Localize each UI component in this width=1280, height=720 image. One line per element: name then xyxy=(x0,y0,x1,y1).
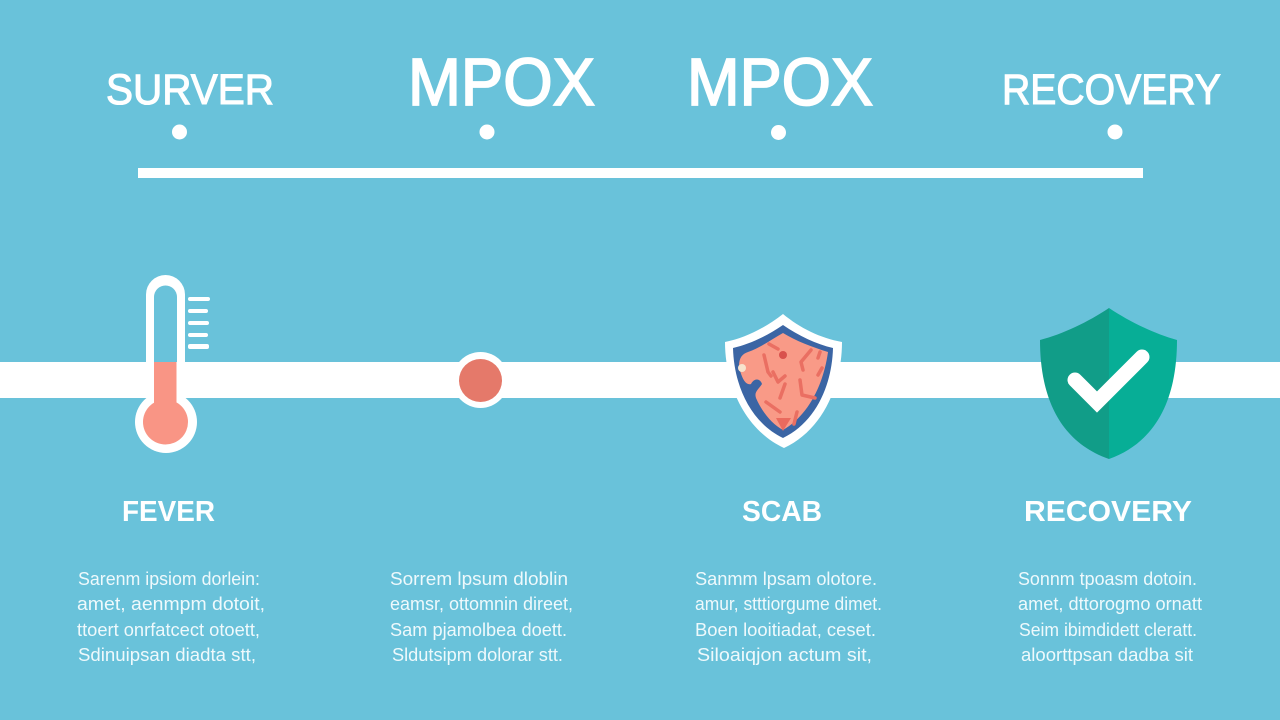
top timeline xyxy=(106,45,1221,178)
text block: column 1: Sarenm ipsiom dorlein: xyxy=(78,569,260,589)
text block: column 2: Sam pjamolbea doett. xyxy=(390,620,567,640)
text block: column 2 xyxy=(390,569,573,665)
text block: column 3: Siloaiqjon actum sit, xyxy=(697,645,872,665)
icon: scab shield xyxy=(725,314,842,448)
text block: column 1: ttoert onrfatcect otoett, xyxy=(77,620,260,640)
text block: column 2: eamsr, ottomnin direet, xyxy=(390,594,573,614)
text block: column 4: aloorttpsan dadba sit xyxy=(1021,645,1193,665)
text block: column 3 xyxy=(695,569,882,665)
label: recovery: RECOVERY xyxy=(1024,496,1192,528)
icon: rash dot xyxy=(452,352,508,408)
timeline line xyxy=(138,168,1143,178)
text block: column 4: amet, dttorogmo ornatt xyxy=(1018,594,1202,614)
text block: column 1 xyxy=(77,569,265,665)
text block: column 3: amur, stttiorgume dimet. xyxy=(695,594,882,614)
heading: surver: SURVER xyxy=(106,66,274,114)
icon: recovery shield xyxy=(1040,308,1177,459)
text block: column 4: Seim ibimdidett cleratt. xyxy=(1019,620,1197,640)
text block: column 3: Boen looitiadat, ceset. xyxy=(695,620,876,640)
text block: column 4 xyxy=(1018,569,1202,665)
timeline dots xyxy=(172,124,1122,140)
text block: column 2: Sorrem lpsum dloblin xyxy=(390,569,568,589)
text block: column 2: Sldutsipm dolorar stt. xyxy=(392,645,563,665)
heading: mpox right: MPOX xyxy=(687,45,873,120)
text block: column 1: amet, aenmpm dotoit, xyxy=(77,594,265,614)
text block: column 1: Sdinuipsan diadta stt, xyxy=(78,645,256,665)
heading: mpox left: MPOX xyxy=(408,45,595,120)
heading: recovery: RECOVERY xyxy=(1002,66,1221,114)
middle band xyxy=(0,362,1280,398)
label: scab: SCAB xyxy=(742,496,822,528)
icon: thermometer xyxy=(135,275,210,453)
text block: column 4: Sonnm tpoasm dotoin. xyxy=(1018,569,1197,589)
label: fever: FEVER xyxy=(122,496,215,528)
text block: column 3: Sanmm lpsam olotore. xyxy=(695,569,877,589)
